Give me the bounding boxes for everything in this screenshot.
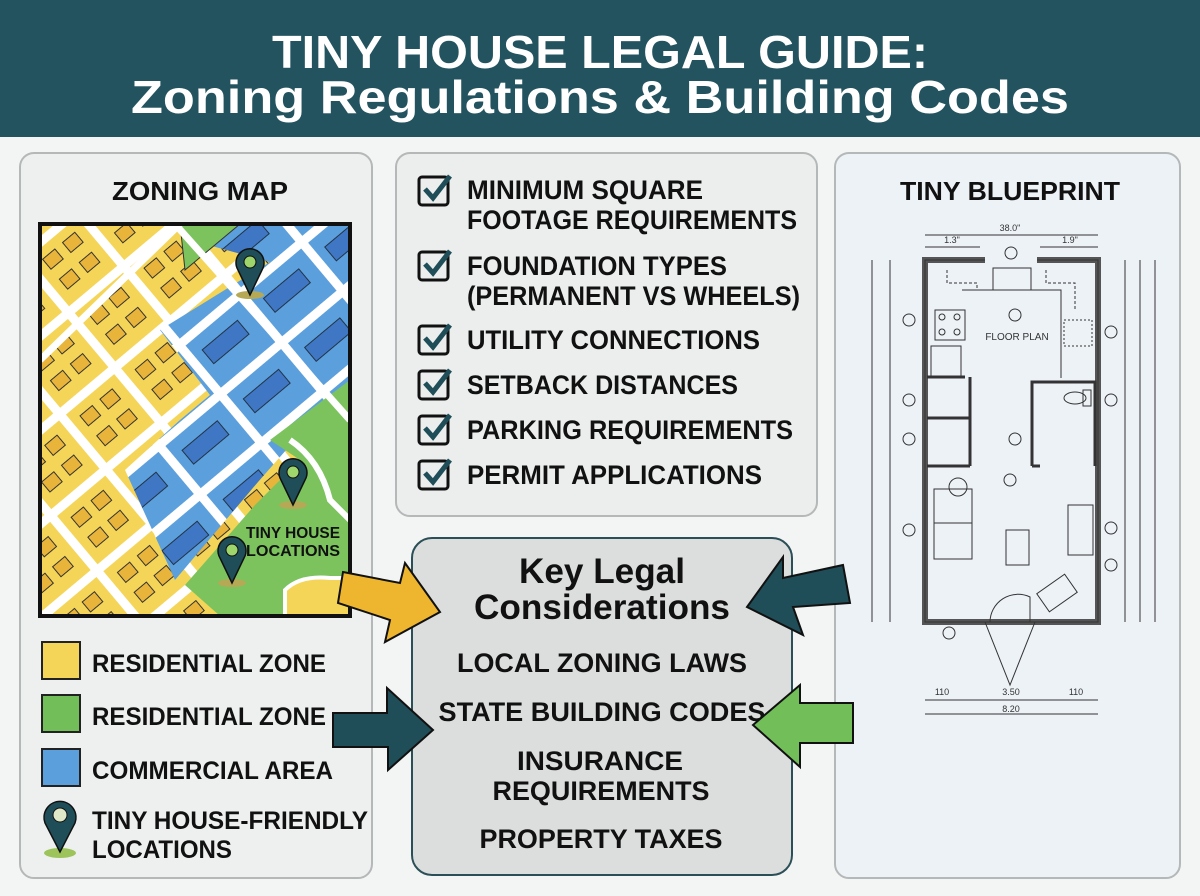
panel: zoning map bbox=[20, 153, 372, 878]
legend: RESIDENTIAL ZONE bbox=[92, 650, 326, 678]
heading: zoning map: ZONING MAP bbox=[112, 176, 288, 206]
checklist item 5: PARKING REQUIREMENTS bbox=[467, 415, 793, 445]
floor plan drawing: 38.0" bbox=[1000, 223, 1020, 233]
arrow: teal from blueprint bbox=[747, 557, 850, 635]
map bbox=[40, 224, 350, 616]
icon: map pin 3 bbox=[218, 537, 246, 587]
considerations list: PROPERTY TAXES bbox=[480, 824, 722, 854]
considerations list: REQUIREMENTS bbox=[492, 776, 710, 806]
icon: map pin 1 bbox=[236, 249, 264, 299]
checklist item 2: FOUNDATION TYPES bbox=[467, 251, 727, 281]
checklist item 6: PERMIT APPLICATIONS bbox=[467, 460, 762, 490]
considerations list: LOCAL ZONING LAWS bbox=[457, 648, 747, 678]
panel: checklist bbox=[396, 153, 817, 516]
considerations list: INSURANCE bbox=[517, 746, 683, 776]
floor plan drawing bbox=[872, 223, 1155, 714]
arrow: yellow from map bbox=[338, 563, 440, 642]
heading: key legal considerations: Key Legal bbox=[519, 552, 685, 591]
floor plan drawing: 110 bbox=[935, 687, 949, 697]
floor plan drawing: FLOOR PLAN bbox=[985, 332, 1049, 343]
title: Zoning Regulations & Building Codes bbox=[131, 71, 1069, 123]
title bbox=[131, 26, 1069, 123]
legend bbox=[42, 642, 368, 864]
heading: tiny blueprint: TINY BLUEPRINT bbox=[900, 176, 1120, 206]
panel: key legal considerations bbox=[412, 538, 792, 875]
header banner bbox=[0, 0, 1200, 137]
arrow: green from blueprint bbox=[753, 685, 853, 767]
map label: LOCATIONS bbox=[246, 543, 340, 560]
checklist item 2: (PERMANENT VS WHEELS) bbox=[467, 281, 800, 311]
floor plan drawing: 1.3" bbox=[944, 235, 960, 245]
floor plan drawing: 110 bbox=[1069, 687, 1083, 697]
considerations list bbox=[438, 648, 766, 854]
legend: COMMERCIAL AREA bbox=[92, 757, 333, 785]
floor plan drawing: 8.20 bbox=[1002, 704, 1020, 714]
floor plan drawing: 3.50 bbox=[1002, 687, 1020, 697]
map label bbox=[246, 525, 340, 560]
title: TINY HOUSE LEGAL GUIDE: bbox=[272, 26, 928, 78]
checklist item 1 bbox=[419, 175, 797, 235]
legend: LOCATIONS bbox=[92, 836, 232, 864]
panel: tiny blueprint bbox=[835, 153, 1180, 878]
icon: map pin 2 bbox=[279, 459, 307, 509]
checklist item 2 bbox=[419, 251, 800, 311]
legend: TINY HOUSE-FRIENDLY bbox=[92, 807, 368, 835]
checklist item 1: FOOTAGE REQUIREMENTS bbox=[467, 205, 797, 235]
checklist item 3: UTILITY CONNECTIONS bbox=[467, 325, 760, 355]
heading: key legal considerations bbox=[474, 552, 730, 627]
heading: key legal considerations: Considerations bbox=[474, 588, 730, 627]
floor plan drawing: 1.9" bbox=[1062, 235, 1078, 245]
checklist item 4: SETBACK DISTANCES bbox=[467, 370, 738, 400]
map label: TINY HOUSE bbox=[246, 525, 340, 542]
considerations list: STATE BUILDING CODES bbox=[438, 697, 766, 727]
checklist item 1: MINIMUM SQUARE bbox=[467, 175, 703, 205]
arrow: teal from legend bbox=[333, 688, 433, 770]
legend: RESIDENTIAL ZONE bbox=[92, 703, 326, 731]
